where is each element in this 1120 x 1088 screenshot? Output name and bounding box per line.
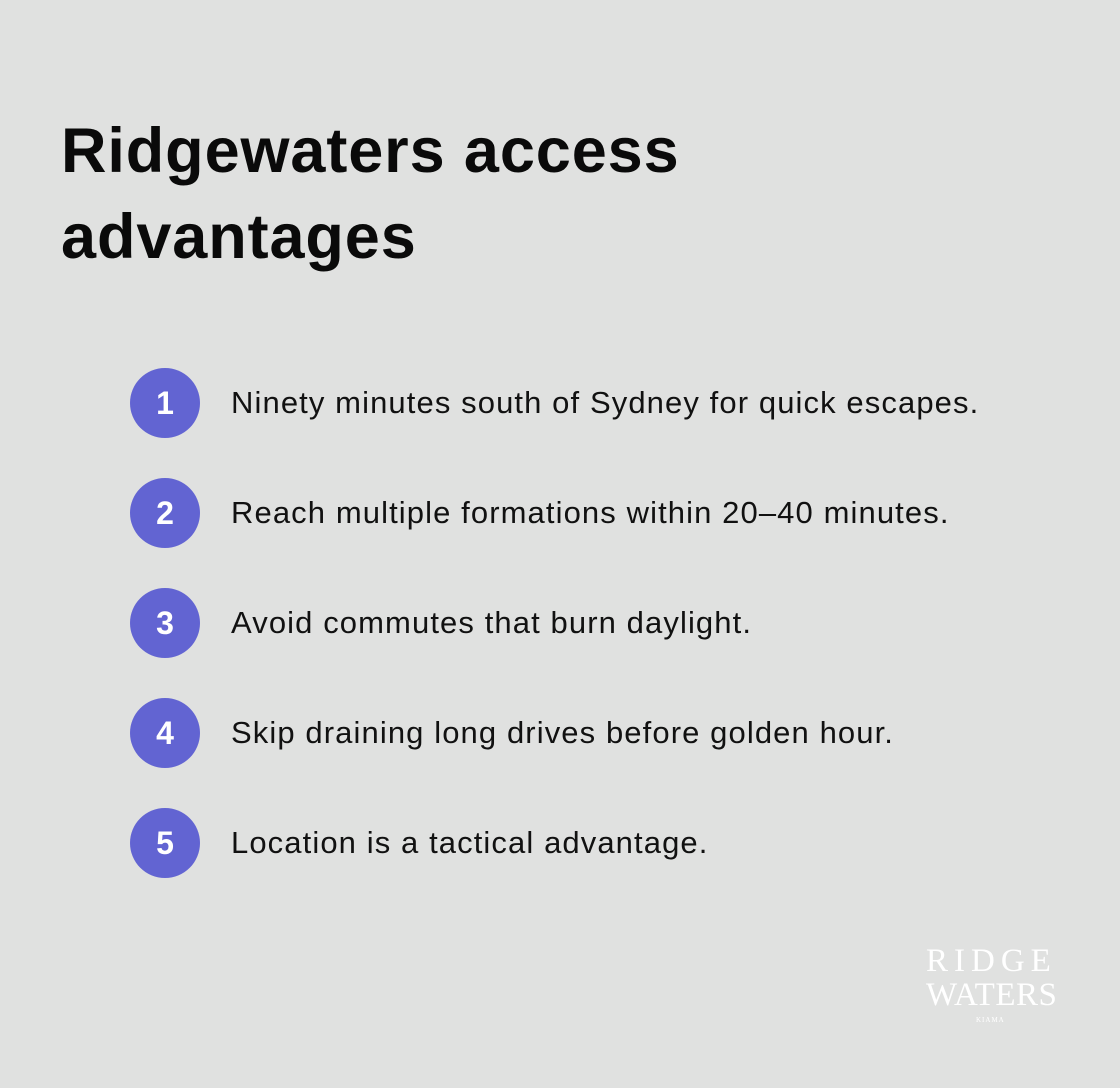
title	[61, 116, 680, 272]
item 1: 1	[156, 385, 174, 421]
item 2	[130, 478, 950, 548]
item 5: 5	[156, 825, 174, 861]
title: Ridgewaters access	[61, 116, 680, 186]
title: advantages	[61, 202, 417, 272]
item 3: 3	[156, 605, 174, 641]
item 4	[130, 698, 894, 768]
logo	[926, 943, 1057, 1024]
item 4: Skip draining long drives before golden hour.	[231, 715, 894, 750]
item 4: 4	[156, 715, 174, 751]
item 5: Location is a tactical advantage.	[231, 825, 708, 860]
item 2: Reach multiple formations within 20–40 minutes.	[231, 495, 950, 530]
item 2: 2	[156, 495, 174, 531]
logo: KIAMA	[976, 1016, 1005, 1024]
item 3: Avoid commutes that burn daylight.	[231, 605, 752, 640]
item 5	[130, 808, 708, 878]
item 1: Ninety minutes south of Sydney for quick escapes.	[231, 385, 979, 420]
logo: WATERS	[926, 977, 1057, 1013]
logo: RIDGE	[926, 943, 1057, 979]
item 3	[130, 588, 752, 658]
item 1	[130, 368, 979, 438]
